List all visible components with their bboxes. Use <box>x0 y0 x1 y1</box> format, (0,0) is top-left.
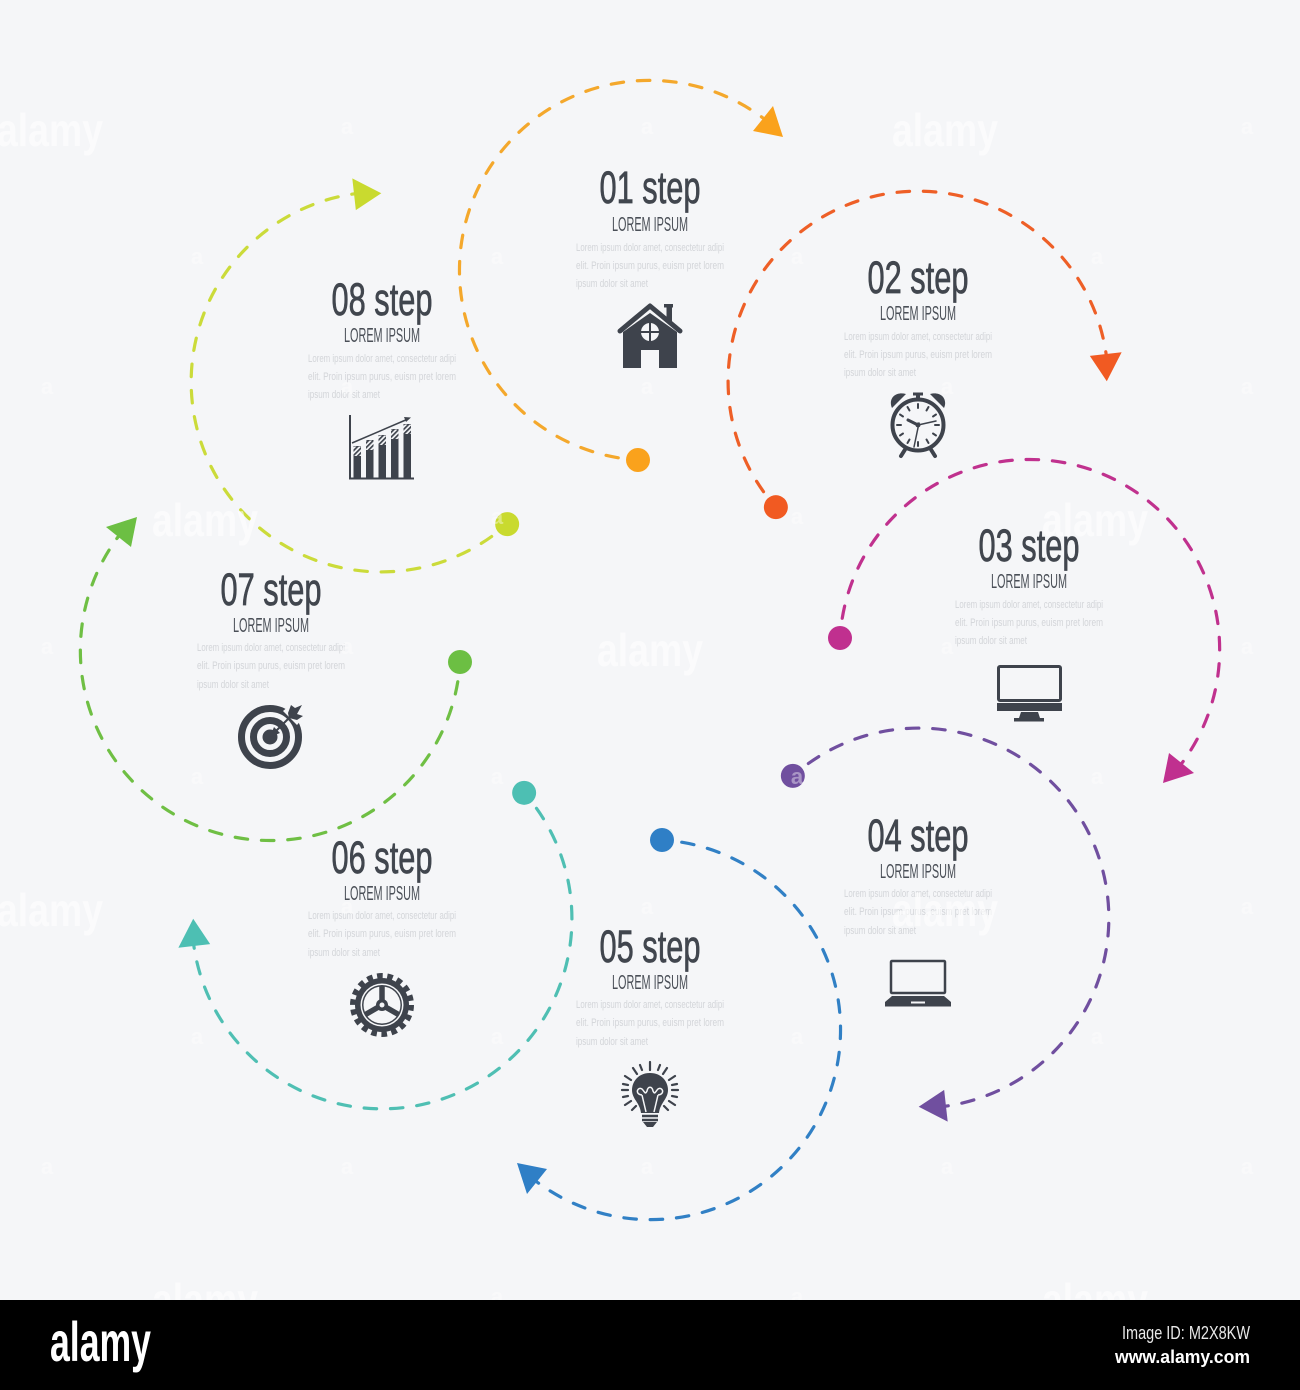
arc arrow: step 01 <box>459 80 783 472</box>
body text: elit. Proin ipsum purus, euism pret lorem <box>308 928 456 940</box>
body text: Lorem ipsum dolor amet, consectetur adipi <box>308 353 456 365</box>
body text: Lorem ipsum dolor amet, consectetur adipi <box>576 242 724 254</box>
body text <box>955 599 1103 647</box>
watermarks: a <box>491 764 504 789</box>
body text: elit. Proin ipsum purus, euism pret lorem <box>844 349 992 361</box>
panel: step 02 <box>641 112 1147 618</box>
arc arrow: step 04 <box>682 641 1188 1147</box>
heading: 02 step: 02 step <box>868 252 968 303</box>
icon: light bulb <box>622 1062 678 1127</box>
watermarks: a <box>641 1154 654 1179</box>
watermarks: a <box>191 244 204 269</box>
body text: Lorem ipsum dolor amet, consectetur adipi <box>955 599 1103 611</box>
watermarks: a <box>1091 764 1104 789</box>
watermarks: alamy <box>0 104 103 156</box>
watermarks: alamy <box>152 1274 258 1326</box>
arc arrow: step 05 <box>517 828 841 1220</box>
body text <box>576 999 724 1048</box>
watermarks: a <box>1091 1024 1104 1049</box>
watermarks: alamy <box>892 104 998 156</box>
watermarks: a <box>41 374 54 399</box>
body text: ipsum dolor sit amet <box>197 679 269 691</box>
footer bar <box>0 1300 1300 1390</box>
watermarks: a <box>491 504 504 529</box>
watermarks: a <box>641 374 654 399</box>
body text <box>844 331 992 379</box>
subheading: LOREM IPSUM <box>991 571 1067 593</box>
icon: house <box>620 304 680 368</box>
heading: 03 step: 03 step <box>978 520 1080 571</box>
subheading: LOREM IPSUM <box>612 214 688 236</box>
body text <box>308 910 456 959</box>
subheading: LOREM IPSUM <box>880 303 956 325</box>
watermarks: a <box>791 1024 804 1049</box>
panel: step 07 <box>80 517 472 841</box>
subheading: LOREM IPSUM <box>233 615 309 637</box>
body text <box>197 642 345 691</box>
heading: 07 step: 07 step <box>220 564 322 615</box>
watermarks: a <box>1241 374 1254 399</box>
heading: 05 step: 05 step <box>600 921 700 972</box>
body text: Lorem ipsum dolor amet, consectetur adipi <box>197 642 345 654</box>
heading: 04 step: 04 step <box>868 810 968 861</box>
watermarks: a <box>191 1024 204 1049</box>
icon: laptop <box>885 961 951 1006</box>
watermarks: a <box>641 114 654 139</box>
watermarks: a <box>41 634 54 659</box>
body text: Lorem ipsum dolor amet, consectetur adipi <box>576 999 724 1011</box>
watermarks: a <box>1241 894 1254 919</box>
heading: 06 step: 06 step <box>332 832 432 883</box>
watermarks: alamy <box>1042 1274 1148 1326</box>
watermarks: a <box>1241 1154 1254 1179</box>
subheading: LOREM IPSUM <box>612 972 688 994</box>
body text: ipsum dolor sit amet <box>844 925 916 937</box>
footer image id: Image ID: M2X8KW <box>1122 1323 1250 1343</box>
panel: step 05 <box>517 828 841 1220</box>
arc arrow: step 06 <box>153 682 659 1188</box>
watermarks: a <box>1241 634 1254 659</box>
watermarks: alamy <box>0 884 103 936</box>
body text: ipsum dolor sit amet <box>308 947 380 959</box>
subheading: LOREM IPSUM <box>344 883 420 905</box>
icon: desktop monitor <box>997 666 1062 722</box>
body text: elit. Proin ipsum purus, euism pret lorem <box>576 260 724 272</box>
watermarks: a <box>491 1024 504 1049</box>
watermarks: a <box>41 1154 54 1179</box>
heading: 08 step: 08 step <box>332 274 432 325</box>
subheading: LOREM IPSUM <box>344 325 420 347</box>
watermarks: a <box>341 894 354 919</box>
body text: elit. Proin ipsum purus, euism pret lorem <box>576 1017 724 1029</box>
watermarks: a <box>341 374 354 399</box>
body text: elit. Proin ipsum purus, euism pret lorem <box>308 371 456 383</box>
panel: step 04 <box>682 641 1188 1147</box>
footer logo: alamy <box>50 1310 151 1373</box>
body text: ipsum dolor sit amet <box>576 278 648 290</box>
arc arrow: step 02 <box>641 112 1147 618</box>
watermarks: a <box>941 374 954 399</box>
icon: bar chart <box>349 415 414 480</box>
watermarks: a <box>791 244 804 269</box>
watermarks: a <box>341 1154 354 1179</box>
body text: elit. Proin ipsum purus, euism pret lorem <box>955 617 1103 629</box>
arc arrow: step 03 <box>828 459 1220 783</box>
panel: step 03 <box>828 459 1220 783</box>
watermarks: a <box>491 1284 504 1309</box>
arc arrow: step 07 <box>80 517 472 841</box>
body text: elit. Proin ipsum purus, euism pret lorem <box>844 906 992 918</box>
footer url: www.alamy.com <box>1114 1347 1250 1367</box>
heading: 01 step: 01 step <box>600 162 700 213</box>
body text: Lorem ipsum dolor amet, consectetur adipi <box>844 888 992 900</box>
watermarks: a <box>791 1284 804 1309</box>
watermarks: a <box>941 634 954 659</box>
watermarks: a <box>941 1154 954 1179</box>
watermarks: alamy <box>152 494 258 546</box>
watermarks: a <box>341 114 354 139</box>
panel: step 01 <box>459 80 783 472</box>
body text: ipsum dolor sit amet <box>844 367 916 379</box>
watermarks: a <box>491 244 504 269</box>
body text: elit. Proin ipsum purus, euism pret lorem <box>197 660 345 672</box>
arc arrow: step 08 <box>112 153 618 659</box>
icon: gear <box>353 976 411 1034</box>
body text <box>844 888 992 937</box>
watermarks: a <box>1091 244 1104 269</box>
body text: Lorem ipsum dolor amet, consectetur adipi <box>308 910 456 922</box>
body text: ipsum dolor sit amet <box>308 389 380 401</box>
panel: step 06 <box>153 682 659 1188</box>
watermarks: a <box>641 894 654 919</box>
watermarks: alamy <box>892 884 998 936</box>
icon: target with dart <box>242 700 308 766</box>
watermarks: a <box>791 504 804 529</box>
icon: alarm clock <box>891 392 945 456</box>
watermarks: alamy <box>1042 494 1148 546</box>
body text: ipsum dolor sit amet <box>576 1036 648 1048</box>
watermarks: a <box>191 764 204 789</box>
watermarks: a <box>341 634 354 659</box>
body text <box>576 242 724 290</box>
panel: step 08 <box>112 153 618 659</box>
watermarks: alamy <box>597 624 703 676</box>
body text: ipsum dolor sit amet <box>955 635 1027 647</box>
watermarks: a <box>1241 114 1254 139</box>
subheading: LOREM IPSUM <box>880 861 956 883</box>
body text: Lorem ipsum dolor amet, consectetur adipi <box>844 331 992 343</box>
body text <box>308 353 456 401</box>
watermarks: a <box>791 764 804 789</box>
